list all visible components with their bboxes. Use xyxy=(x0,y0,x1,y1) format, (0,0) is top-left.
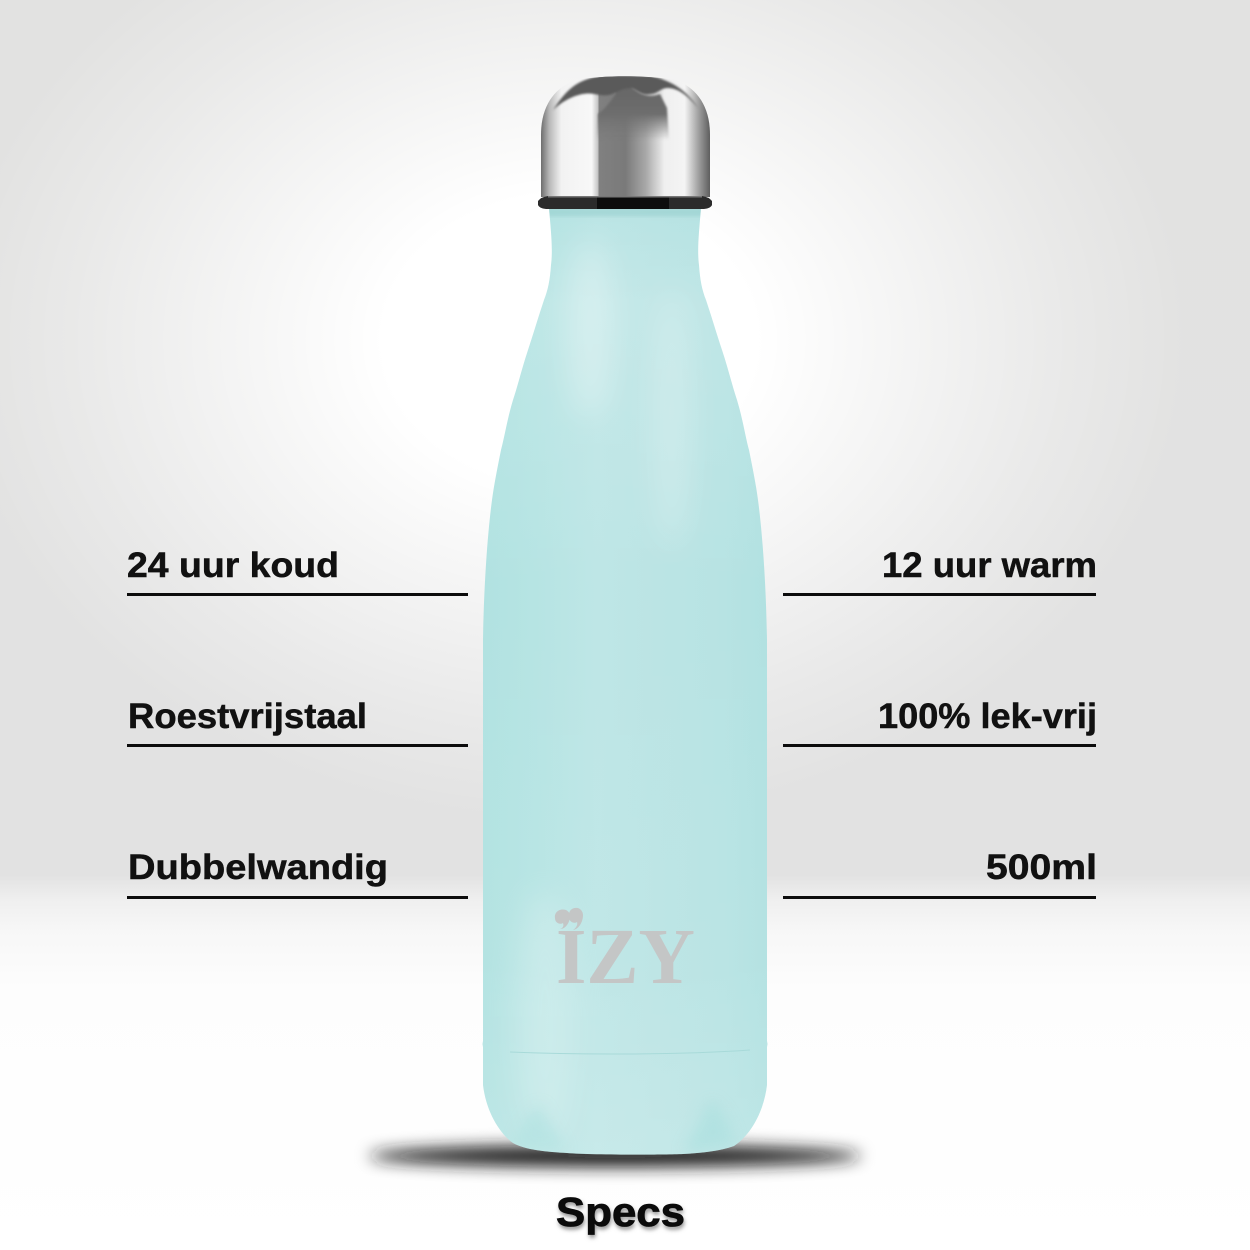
cap ring xyxy=(538,196,712,209)
water bottle xyxy=(480,75,770,1160)
logo: IZY: IZY xyxy=(556,914,695,1001)
left spec: Dubbelwandig: Dubbelwandig xyxy=(128,848,388,887)
left spec: 24 uur koud: 24 uur koud xyxy=(127,546,339,585)
left spec: Roestvrijstaal xyxy=(127,697,468,747)
bottle shadow xyxy=(369,1145,861,1167)
right spec: 100% lek-vrij: 100% lek-vrij xyxy=(878,697,1097,736)
left spec: 24 uur koud xyxy=(127,546,468,596)
right spec: 12 uur warm: 12 uur warm xyxy=(882,546,1097,585)
right spec: 500ml: 500ml xyxy=(986,848,1097,887)
right spec: 500ml xyxy=(783,848,1097,899)
heading: Specs: Specs xyxy=(556,1189,685,1235)
left spec: Dubbelwandig xyxy=(127,848,468,899)
bottle body xyxy=(480,205,770,1160)
steel cap xyxy=(538,75,712,209)
right spec: 12 uur warm xyxy=(783,546,1097,596)
left spec: Roestvrijstaal: Roestvrijstaal xyxy=(128,697,367,736)
right spec: 100% lek-vrij xyxy=(783,697,1097,747)
heading: Specs: Specs xyxy=(557,1192,686,1238)
